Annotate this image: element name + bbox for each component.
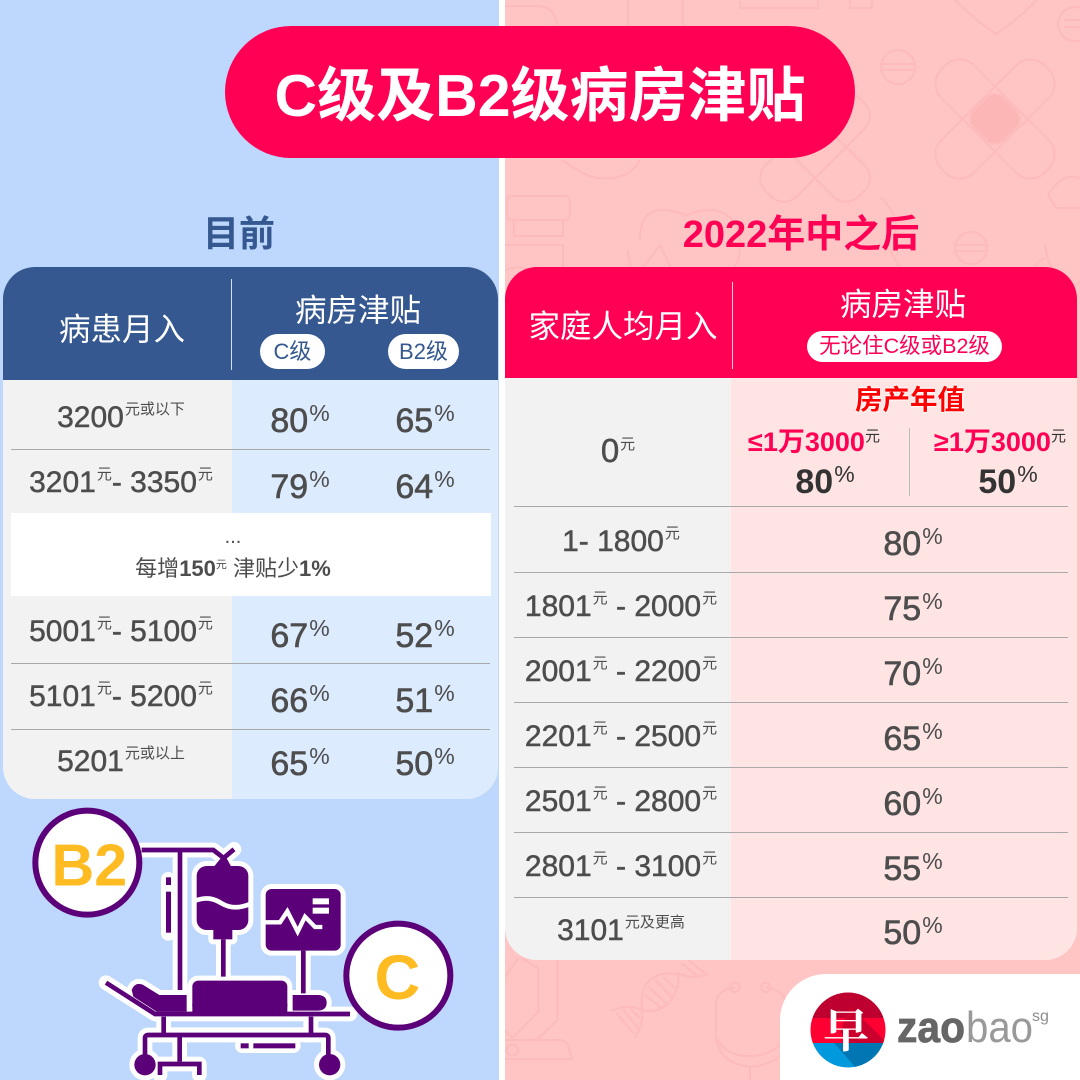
row: 5001 to 5100: 52% xyxy=(395,615,455,655)
row: 2001 to 2200: 70% xyxy=(883,653,943,693)
heading: after mid-2022: 2022年中之后 xyxy=(683,214,919,256)
row: 3200 or below: 65% xyxy=(395,400,455,440)
pill: class B2: B2级 xyxy=(399,339,448,364)
row: 5201 or above: 65% xyxy=(270,743,330,783)
row: 2801 to 3100 xyxy=(525,848,943,888)
row: 2801 to 3100: 55% xyxy=(883,848,943,888)
badge: B2 xyxy=(35,811,139,915)
logo mark xyxy=(810,992,886,1068)
row: 2501 to 2800: 60% xyxy=(883,783,943,823)
row: 5201 or above: 5201元或以上 xyxy=(57,745,185,778)
badge: B2: B2 xyxy=(51,832,127,899)
row: 2501 to 2800: 2501元 - 2800元 xyxy=(525,785,717,818)
row: 2001 to 2200 xyxy=(525,653,943,693)
row: 1801 to 2000: 75% xyxy=(883,588,943,628)
pill: regardless of class: 无论住C级或B2级 xyxy=(819,334,990,358)
panel: left blue background xyxy=(0,0,499,1080)
title pill: C级及B2级病房津贴 xyxy=(274,63,806,129)
row: 1801 to 2000 xyxy=(525,588,943,628)
table header: household income and ward subsidy xyxy=(505,267,1077,378)
pill: class C: C级 xyxy=(274,339,311,364)
row: 5101 to 5200 xyxy=(29,680,455,720)
row: 3101 and higher: 3101元及更高 xyxy=(557,914,685,947)
table header: patient income and ward subsidy xyxy=(3,267,498,380)
logo wordmark: sg xyxy=(1032,1008,1049,1025)
note: each 150 yuan increase lowers subsidy by 1%: ... xyxy=(225,526,241,548)
row: 3200 or below: 3200元或以下 xyxy=(57,401,185,434)
logo wordmark: bao xyxy=(966,1003,1033,1052)
panel: current subsidy table xyxy=(3,267,498,799)
note: each 150 yuan increase lowers subsidy by 1% xyxy=(11,513,491,596)
panel: right pink background with faint medical icons xyxy=(505,0,1080,1080)
pill: regardless of class xyxy=(807,331,1002,362)
threshold: above 13000: ≥1万3000元 xyxy=(934,427,1066,457)
row: 2501 to 2800 xyxy=(525,783,943,823)
row: 5001 to 5100: 5001元- 5100元 xyxy=(29,615,213,648)
row: 5001 to 5100 xyxy=(29,615,455,655)
row: 5101 to 5200: 5101元- 5200元 xyxy=(29,680,213,713)
row: 3201 to 3350: 3201元- 3350元 xyxy=(29,466,213,499)
header: patient monthly income: 病患月入 xyxy=(59,311,185,347)
logo panel: zaobao.sg xyxy=(780,974,1080,1080)
heading: current: 目前 xyxy=(203,213,275,254)
pill: class B2 xyxy=(388,334,459,369)
panel: post-2022 subsidy table xyxy=(505,267,1077,960)
row: 3201 to 3350: 79% xyxy=(270,466,330,506)
pill: class C xyxy=(260,334,325,369)
row: 3201 to 3350 xyxy=(29,466,455,506)
threshold: up to 13000: ≤1万3000元 xyxy=(748,427,880,457)
label: 0 yuan: 0元 xyxy=(601,432,635,469)
header: household per capita monthly income: 家庭人均月入 xyxy=(528,308,718,344)
row: 5001 to 5100: 67% xyxy=(270,615,330,655)
row: 3101 and higher xyxy=(557,912,943,952)
illustration: hospital bed with IV drip and monitor, B2 and C badges xyxy=(32,808,454,1080)
value: 50 percent: 50% xyxy=(978,461,1038,501)
row: 5201 or above xyxy=(57,743,455,783)
header: ward subsidy: 病房津贴 xyxy=(295,292,421,328)
badge: C xyxy=(346,924,450,1028)
row: 1801 to 2000: 1801元 - 2000元 xyxy=(525,590,717,623)
row: 3200 or below: 80% xyxy=(270,400,330,440)
row: 2801 to 3100: 2801元 - 3100元 xyxy=(525,850,717,883)
row: 1 to 1800: 80% xyxy=(883,523,943,563)
row: 3200 or below xyxy=(57,400,455,440)
row: 3201 to 3350: 64% xyxy=(395,466,455,506)
row: 5201 or above: 50% xyxy=(395,743,455,783)
row: 1 to 1800: 1- 1800元 xyxy=(562,525,680,558)
row: 3101 and higher: 50% xyxy=(883,912,943,952)
value: 80 percent: 80% xyxy=(795,461,855,501)
badge: C: C xyxy=(374,943,420,1013)
row: 2201 to 2500 xyxy=(525,718,943,758)
logo mark: 早 xyxy=(823,1006,869,1057)
note: each 150 yuan increase lowers subsidy by 1%: 每增150元 津贴少1% xyxy=(135,556,331,581)
row: 5101 to 5200: 51% xyxy=(395,680,455,720)
row: 2201 to 2500: 65% xyxy=(883,718,943,758)
row: 2001 to 2200: 2001元 - 2200元 xyxy=(525,655,717,688)
title pill xyxy=(225,26,855,158)
label: annual property value: 房产年值 xyxy=(855,384,965,415)
row: 2201 to 2500: 2201元 - 2500元 xyxy=(525,720,717,753)
row: 5101 to 5200: 66% xyxy=(270,680,330,720)
row: 1 to 1800 xyxy=(562,523,943,563)
row: zero income with annual value split xyxy=(601,384,1066,501)
logo wordmark xyxy=(897,1003,1049,1052)
logo wordmark: zao xyxy=(897,1003,965,1052)
header: ward subsidy: 病房津贴 xyxy=(840,286,966,322)
